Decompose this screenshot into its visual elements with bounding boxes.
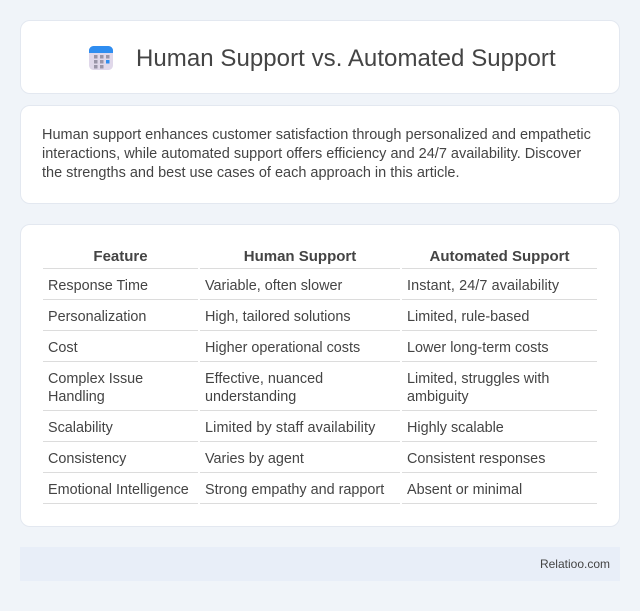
comparison table: Instant, 24/7 availability	[407, 278, 559, 294]
comparison table: Human Support	[244, 248, 356, 265]
footer credit: Relatioo.com	[540, 557, 610, 571]
comparison table: Automated Support	[430, 248, 570, 265]
intro text	[42, 127, 591, 181]
comparison table: Response Time	[48, 278, 148, 294]
title: Human Support vs. Automated Support	[136, 45, 556, 72]
comparison table: Effective, nuanced	[205, 371, 323, 387]
intro card	[20, 105, 620, 204]
comparison table: Highly scalable	[407, 420, 504, 436]
title card	[20, 20, 620, 94]
comparison table: Feature	[93, 248, 148, 265]
table card	[20, 224, 620, 527]
comparison table: Strong empathy and rapport	[205, 482, 384, 498]
intro text: Human support enhances customer satisfaction through personalized and empathetic	[42, 127, 591, 143]
comparison table: Personalization	[48, 309, 146, 325]
comparison table: Lower long-term costs	[407, 340, 549, 356]
comparison table: Scalability	[48, 420, 113, 436]
comparison table: Higher operational costs	[205, 340, 360, 356]
comparison table: Cost	[48, 340, 78, 356]
comparison table: Complex Issue	[48, 371, 143, 387]
comparison table: Consistency	[48, 451, 126, 467]
comparison table: Limited, rule-based	[407, 309, 529, 325]
footer bar	[20, 547, 620, 581]
comparison table: ambiguity	[407, 389, 469, 405]
intro text: the strengths and best use cases of each approach in this article.	[42, 165, 460, 181]
comparison table: Absent or minimal	[407, 482, 522, 498]
intro text: interactions, while automated support offers efficiency and 24/7 availability. Discover	[42, 146, 581, 162]
comparison table: Handling	[48, 389, 105, 405]
comparison table: understanding	[205, 389, 296, 405]
comparison table: Varies by agent	[205, 451, 304, 467]
comparison table: Consistent responses	[407, 451, 545, 467]
comparison table: Emotional Intelligence	[48, 482, 189, 498]
comparison table: High, tailored solutions	[205, 309, 351, 325]
comparison table: Limited, struggles with	[407, 371, 549, 387]
icon: calendar	[89, 46, 113, 70]
comparison table: Variable, often slower	[205, 278, 342, 294]
comparison table: Limited by staff availability	[205, 420, 375, 436]
